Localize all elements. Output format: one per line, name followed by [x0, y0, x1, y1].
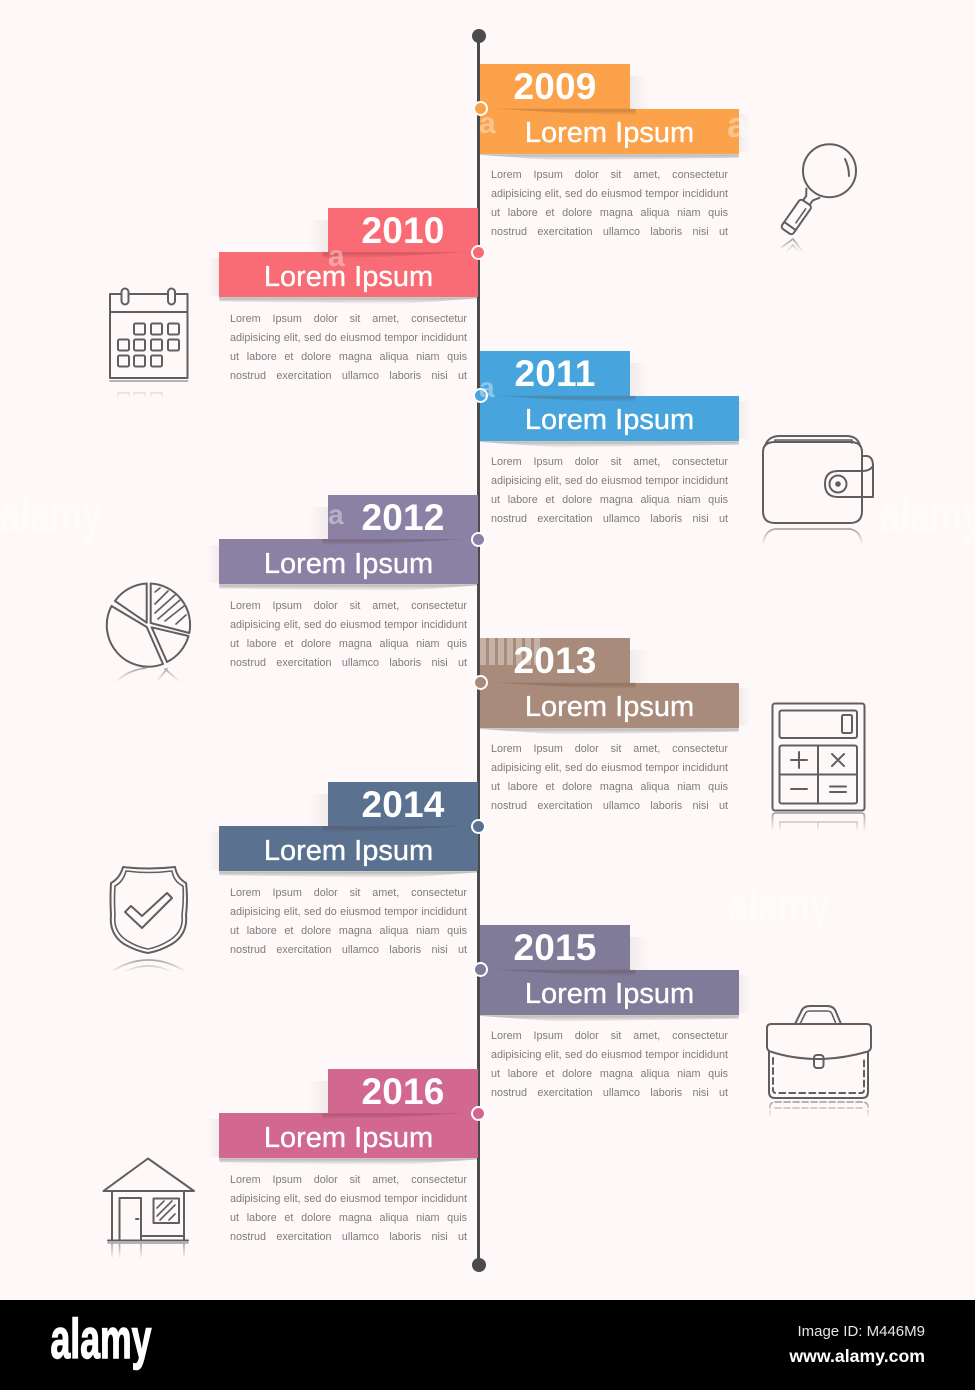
watermark: faint alamy marks: alamy	[0, 487, 102, 543]
icon: calculator	[772, 702, 866, 830]
year label 2016	[328, 1068, 478, 1113]
heading bar 2009: Lorem Ipsum	[525, 116, 694, 148]
body text 2016: ut labore et dolore magna aliqua niam quis	[230, 1212, 467, 1224]
body text 2009: Lorem Ipsum dolor sit amet, consectetur	[491, 168, 728, 180]
body text 2015: nostrud exercitation ullamco laboris nisi ut	[491, 1086, 728, 1098]
year label 2016: 2016	[361, 1070, 445, 1112]
body text 2009: nostrud exercitation ullamco laboris nisi ut	[491, 226, 728, 238]
heading bar 2012: Lorem Ipsum	[264, 548, 433, 580]
watermark: letters on the bars: a	[479, 372, 495, 403]
year label 2010: 2010	[361, 210, 445, 250]
body text 2010: Lorem Ipsum dolor sit amet, consectetur	[230, 313, 467, 325]
body text 2016: Lorem Ipsum dolor sit amet, consectetur	[230, 1174, 467, 1186]
heading bar 2014	[219, 826, 478, 871]
icon: magnifying glass	[780, 143, 857, 251]
marker 2014	[471, 818, 486, 834]
body text 2009	[491, 168, 728, 238]
icon: house	[102, 1158, 195, 1258]
icon: pie chart	[106, 582, 192, 680]
milestone 2009	[475, 64, 743, 238]
footer logo: alamy	[50, 1307, 151, 1370]
heading bar 2015: Lorem Ipsum	[525, 978, 694, 1010]
year label 2012: 2012	[361, 496, 445, 538]
body text 2010: nostrud exercitation ullamco laboris nisi ut	[230, 370, 467, 382]
text: a	[328, 240, 345, 273]
heading bar 2010	[219, 252, 478, 297]
body text 2015: ut labore et dolore magna aliqua niam quis	[491, 1068, 728, 1080]
year label 2013	[480, 638, 630, 682]
body text 2011: Lorem Ipsum dolor sit amet, consectetur	[491, 456, 728, 468]
marker 2016	[471, 1106, 486, 1120]
milestone 2013	[475, 638, 743, 812]
milestone 2011	[475, 351, 743, 524]
icon: calendar	[109, 288, 188, 396]
milestone 2016	[215, 1069, 484, 1243]
year label 2011: 2011	[514, 353, 596, 394]
body text 2011: adipisicing elit, sed do eiusmod tempor incididunt	[491, 474, 728, 486]
body text 2013: ut labore et dolore magna aliqua niam quis	[491, 780, 728, 792]
body text 2012: nostrud exercitation ullamco laboris nisi ut	[230, 657, 467, 669]
heading bar 2011	[480, 396, 739, 440]
icon: wallet	[762, 435, 874, 544]
milestone 2015	[475, 925, 743, 1098]
marker 2009	[472, 100, 488, 116]
body text 2014: nostrud exercitation ullamco laboris nisi ut	[230, 944, 467, 956]
year label 2013: 2013	[513, 640, 597, 681]
year label 2014	[328, 782, 478, 826]
marker 2013	[472, 674, 488, 690]
body text 2009: ut labore et dolore magna aliqua niam quis	[491, 206, 728, 218]
body text 2014: adipisicing elit, sed do eiusmod tempor incididunt	[230, 906, 467, 918]
heading bar 2016: Lorem Ipsum	[264, 1122, 433, 1154]
heading bar 2011: Lorem Ipsum	[525, 404, 694, 436]
heading bar 2012	[219, 539, 478, 584]
year label 2015	[480, 925, 630, 970]
body text 2016: adipisicing elit, sed do eiusmod tempor incididunt	[230, 1193, 467, 1205]
marker 2010	[471, 244, 486, 260]
year label 2009: 2009	[513, 66, 597, 107]
watermark: letters on the bars: a	[479, 107, 496, 140]
footer website: www.alamy.com	[789, 1346, 925, 1366]
milestone 2014	[215, 782, 484, 956]
watermark: letters on the bars	[328, 104, 845, 766]
heading bar 2013	[480, 682, 739, 728]
heading bar 2016	[219, 1113, 478, 1158]
year label 2015: 2015	[513, 927, 597, 968]
icon: shield with check	[110, 866, 188, 971]
body text 2011: ut labore et dolore magna aliqua niam quis	[491, 494, 728, 506]
marker 2015	[472, 962, 488, 976]
body text 2013: Lorem Ipsum dolor sit amet, consectetur	[491, 742, 728, 754]
body text 2012: Lorem Ipsum dolor sit amet, consectetur	[230, 600, 467, 612]
body text 2009: adipisicing elit, sed do eiusmod tempor incididunt	[491, 188, 728, 200]
body text 2012: ut labore et dolore magna aliqua niam quis	[230, 638, 467, 650]
heading bar 2015	[480, 970, 739, 1014]
body text 2010: adipisicing elit, sed do eiusmod tempor incididunt	[230, 332, 467, 344]
body text 2014: ut labore et dolore magna aliqua niam quis	[230, 925, 467, 937]
milestone 2012	[215, 495, 484, 669]
body text 2015: Lorem Ipsum dolor sit amet, consectetur	[491, 1030, 728, 1042]
body text 2013: adipisicing elit, sed do eiusmod tempor incididunt	[491, 762, 728, 774]
watermark: letters on the bars: a	[727, 104, 747, 145]
body text 2015	[491, 1030, 728, 1098]
body text 2010: ut labore et dolore magna aliqua niam quis	[230, 351, 467, 363]
timeline axis	[477, 36, 480, 1265]
body text 2014	[230, 887, 467, 956]
marker 2012	[471, 532, 486, 546]
footer image id: Image ID: M446M9	[797, 1323, 925, 1340]
text: a	[328, 499, 344, 530]
milestone 2010	[215, 208, 484, 382]
body text 2012: adipisicing elit, sed do eiusmod tempor incididunt	[230, 619, 467, 631]
footer bar	[0, 1300, 975, 1390]
body text 2013: nostrud exercitation ullamco laboris nisi ut	[491, 800, 728, 812]
body text 2015: adipisicing elit, sed do eiusmod tempor incididunt	[491, 1048, 728, 1060]
heading bar 2013: Lorem Ipsum	[525, 690, 694, 722]
body text 2013	[491, 742, 728, 812]
year label 2011	[480, 351, 630, 396]
year label 2014: 2014	[361, 784, 445, 824]
body text 2016: nostrud exercitation ullamco laboris nisi ut	[230, 1231, 467, 1243]
year label 2010	[328, 208, 478, 252]
timeline top cap	[472, 29, 486, 43]
body text 2010	[230, 313, 467, 382]
body text 2012	[230, 600, 467, 669]
body text 2011: nostrud exercitation ullamco laboris nisi ut	[491, 512, 728, 524]
heading bar 2009	[480, 108, 739, 154]
body text 2014: Lorem Ipsum dolor sit amet, consectetur	[230, 887, 467, 899]
watermark: faint alamy marks: alamy	[728, 877, 830, 933]
icon: briefcase	[766, 1005, 872, 1116]
heading bar 2010: Lorem Ipsum	[264, 261, 433, 293]
body text 2016	[230, 1174, 467, 1243]
year label 2009	[480, 64, 630, 108]
timeline bottom cap	[472, 1258, 486, 1272]
heading bar 2014: Lorem Ipsum	[264, 835, 433, 867]
year label 2012	[328, 494, 478, 539]
body text 2011	[491, 456, 728, 524]
marker 2011	[472, 388, 488, 402]
